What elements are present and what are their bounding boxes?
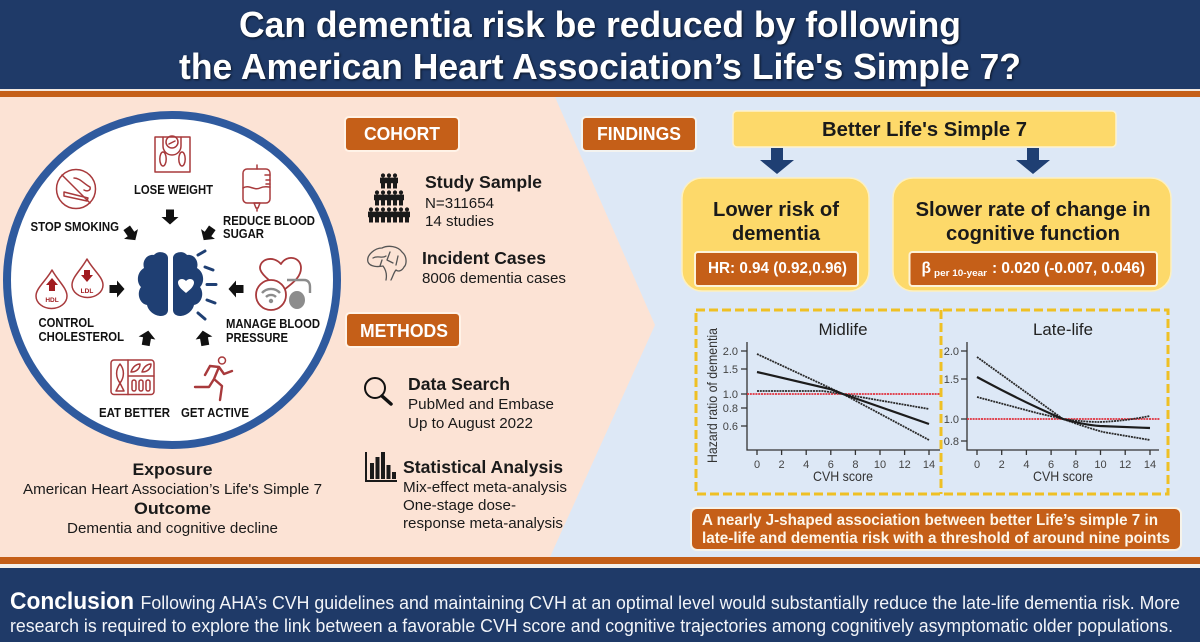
title: the American Heart Association’s Life's Simple 7? (179, 46, 1021, 87)
text block: statistical analysis: Mix-effect meta-analysis (403, 479, 567, 496)
heading box: better life's simple 7 (733, 111, 1116, 147)
icon: no smoking (56, 170, 96, 208)
chart frame: dashed yellow (696, 310, 1168, 494)
label: manage blood pressure: PRESSURE (226, 331, 288, 345)
label: lose weight: LOSE WEIGHT (134, 183, 213, 197)
chart: midlife (704, 320, 940, 484)
label: control cholesterol (38, 316, 124, 344)
chart: late-life: 1.0 (944, 414, 959, 426)
icon: brain with heart (138, 251, 216, 319)
text block: exposure and outcome: American Heart Association’s Life's Simple 7 (23, 481, 322, 498)
text block: exposure and outcome: Exposure (132, 461, 212, 479)
label: reduce blood sugar (223, 214, 315, 241)
chart: late-life: 0 (974, 459, 980, 471)
chart: late-life: 2 (999, 459, 1005, 471)
icon: IV glucose bag (243, 165, 270, 211)
chart: late-life: 2.0 (944, 346, 959, 358)
chart: late-life: Late-life (1033, 320, 1093, 339)
text block: data search: Up to August 2022 (408, 415, 533, 432)
chart: late-life: 14 (1144, 459, 1156, 471)
text block: incident cases: Incident Cases (422, 248, 546, 268)
badge: findings (582, 117, 696, 151)
icon: bar chart (366, 452, 397, 481)
chart: midlife: 0.6 (723, 421, 738, 433)
chart: midlife: 14 (923, 459, 935, 471)
icon: food tray (111, 360, 154, 394)
label: stop smoking: STOP SMOKING (30, 220, 119, 234)
text block: exposure and outcome: Outcome (134, 500, 211, 518)
badge: methods (346, 313, 460, 347)
panel: slower rate of change (893, 178, 1171, 291)
text block: data search: Data Search (408, 374, 510, 394)
icon: HDL and LDL drops (36, 259, 103, 308)
text block: study sample: Study Sample (425, 172, 542, 192)
title (179, 4, 1021, 87)
icon: magnifying glass (365, 378, 391, 404)
text block: statistical analysis (403, 457, 567, 532)
text block: data search (408, 374, 554, 432)
badge: cohort: COHORT (364, 124, 440, 144)
chart: midlife: CVH score (813, 468, 873, 484)
beta result: β (922, 260, 931, 277)
chart: midlife: 0 (754, 459, 760, 471)
text block: study sample: N=311654 (425, 195, 494, 212)
label: manage blood pressure (226, 317, 320, 345)
icon: people pyramid (368, 173, 410, 222)
chart: late-life: 12 (1119, 459, 1131, 471)
chart: midlife: 1.5 (723, 364, 738, 376)
badge: methods: METHODS (360, 321, 448, 341)
panel: lower risk of dementia: dementia (732, 222, 821, 245)
label: reduce blood sugar: REDUCE BLOOD (223, 214, 315, 228)
chart: late-life: 0.8 (944, 436, 959, 448)
arrows pointing to brain (110, 210, 244, 347)
text block: exposure and outcome (23, 461, 322, 537)
panel: peach background arrow (0, 97, 655, 557)
callout: J-shaped association: late-life and dementia risk with a threshold of around nine points (702, 530, 1170, 547)
chart: late-life (944, 320, 1160, 484)
arrow: to lower risk (760, 148, 794, 174)
icon: HDL and LDL drops: LDL (81, 288, 93, 295)
chart: midlife: 8 (852, 459, 858, 471)
label: reduce blood sugar: SUGAR (223, 227, 264, 241)
beta result: : 0.020 (-0.007, 0.046) (992, 260, 1145, 277)
y axis title: Hazard ratio of dementia (704, 328, 720, 463)
header banner (0, 0, 1200, 97)
conclusion text: Conclusion (10, 588, 134, 615)
label: manage blood pressure: MANAGE BLOOD (226, 317, 320, 331)
conclusion text: Following AHA’s CVH guidelines and maintaining CVH at an optimal level would substantially reduce the late-life dementia risk. More (140, 592, 1180, 613)
icon: HDL and LDL drops: HDL (45, 297, 59, 304)
panel: slower rate of change: Slower rate of change in (916, 198, 1150, 221)
badge: findings: FINDINGS (597, 124, 681, 144)
chart: midlife: 10 (874, 459, 886, 471)
conclusion text (10, 588, 1180, 636)
icon: runner (195, 357, 232, 400)
label: eat better: EAT BETTER (99, 406, 170, 420)
title: Can dementia risk be reduced by following (239, 4, 961, 45)
chart: late-life: 1.5 (944, 374, 959, 386)
text block: incident cases: 8006 dementia cases (422, 270, 566, 287)
label: control cholesterol: CHOLESTEROL (38, 330, 124, 344)
arrow: to slower change (1016, 148, 1050, 174)
text block: incident cases (422, 248, 566, 287)
panel: lower risk of dementia (682, 178, 869, 291)
chart: midlife: Midlife (818, 320, 868, 339)
chart: midlife: 2 (779, 459, 785, 471)
chart: late-life: 4 (1023, 459, 1029, 471)
text block: exposure and outcome: Dementia and cognitive decline (67, 520, 278, 537)
callout: J-shaped association: A nearly J-shaped association between better Life’s simple 7 in (702, 512, 1158, 529)
chart: midlife: 12 (898, 459, 911, 471)
text block: statistical analysis: response meta-analysis (403, 515, 563, 532)
badge: cohort (345, 117, 459, 151)
panel: slower rate of change: cognitive function (946, 222, 1120, 245)
beta result (910, 252, 1157, 286)
chart: late-life: CVH score (1033, 468, 1093, 484)
conclusion text: research is required to explore the link between a favorable CVH score and cognitive trajectories among cognitively asymptomatic older populations. (10, 615, 1173, 636)
text block: study sample: 14 studies (425, 213, 494, 230)
text block: statistical analysis: One-stage dose- (403, 497, 516, 514)
chart: midlife: 1.0 (723, 389, 738, 401)
icon: blood pressure monitor (256, 258, 310, 310)
hazard ratio result (695, 252, 858, 286)
chart: midlife: 4 (803, 459, 809, 471)
chart: midlife: 2.0 (723, 346, 738, 358)
icon: weight scale (155, 136, 190, 172)
icon: brain outline (368, 246, 406, 280)
label: get active: GET ACTIVE (181, 406, 249, 420)
chart: late-life: 10 (1094, 459, 1107, 471)
text block: study sample (425, 172, 542, 230)
heading box: better life's simple 7: Better Life's Simple 7 (822, 119, 1027, 141)
chart: late-life: 6 (1048, 459, 1054, 471)
text block: statistical analysis: Statistical Analysis (403, 457, 563, 477)
chart: midlife: 6 (828, 459, 834, 471)
hazard ratio result: HR: 0.94 (0.92,0.96) (708, 260, 847, 277)
chart: midlife: 0.8 (723, 403, 738, 415)
panel: Life's Simple 7 circle (7, 115, 337, 445)
footer banner (0, 557, 1200, 642)
callout: J-shaped association (691, 508, 1181, 550)
text block: data search: PubMed and Embase (408, 396, 554, 413)
chart: late-life: 8 (1073, 459, 1079, 471)
beta result: per 10-year (934, 268, 987, 279)
label: control cholesterol: CONTROL (38, 316, 94, 330)
panel: lower risk of dementia: Lower risk of (713, 198, 839, 221)
